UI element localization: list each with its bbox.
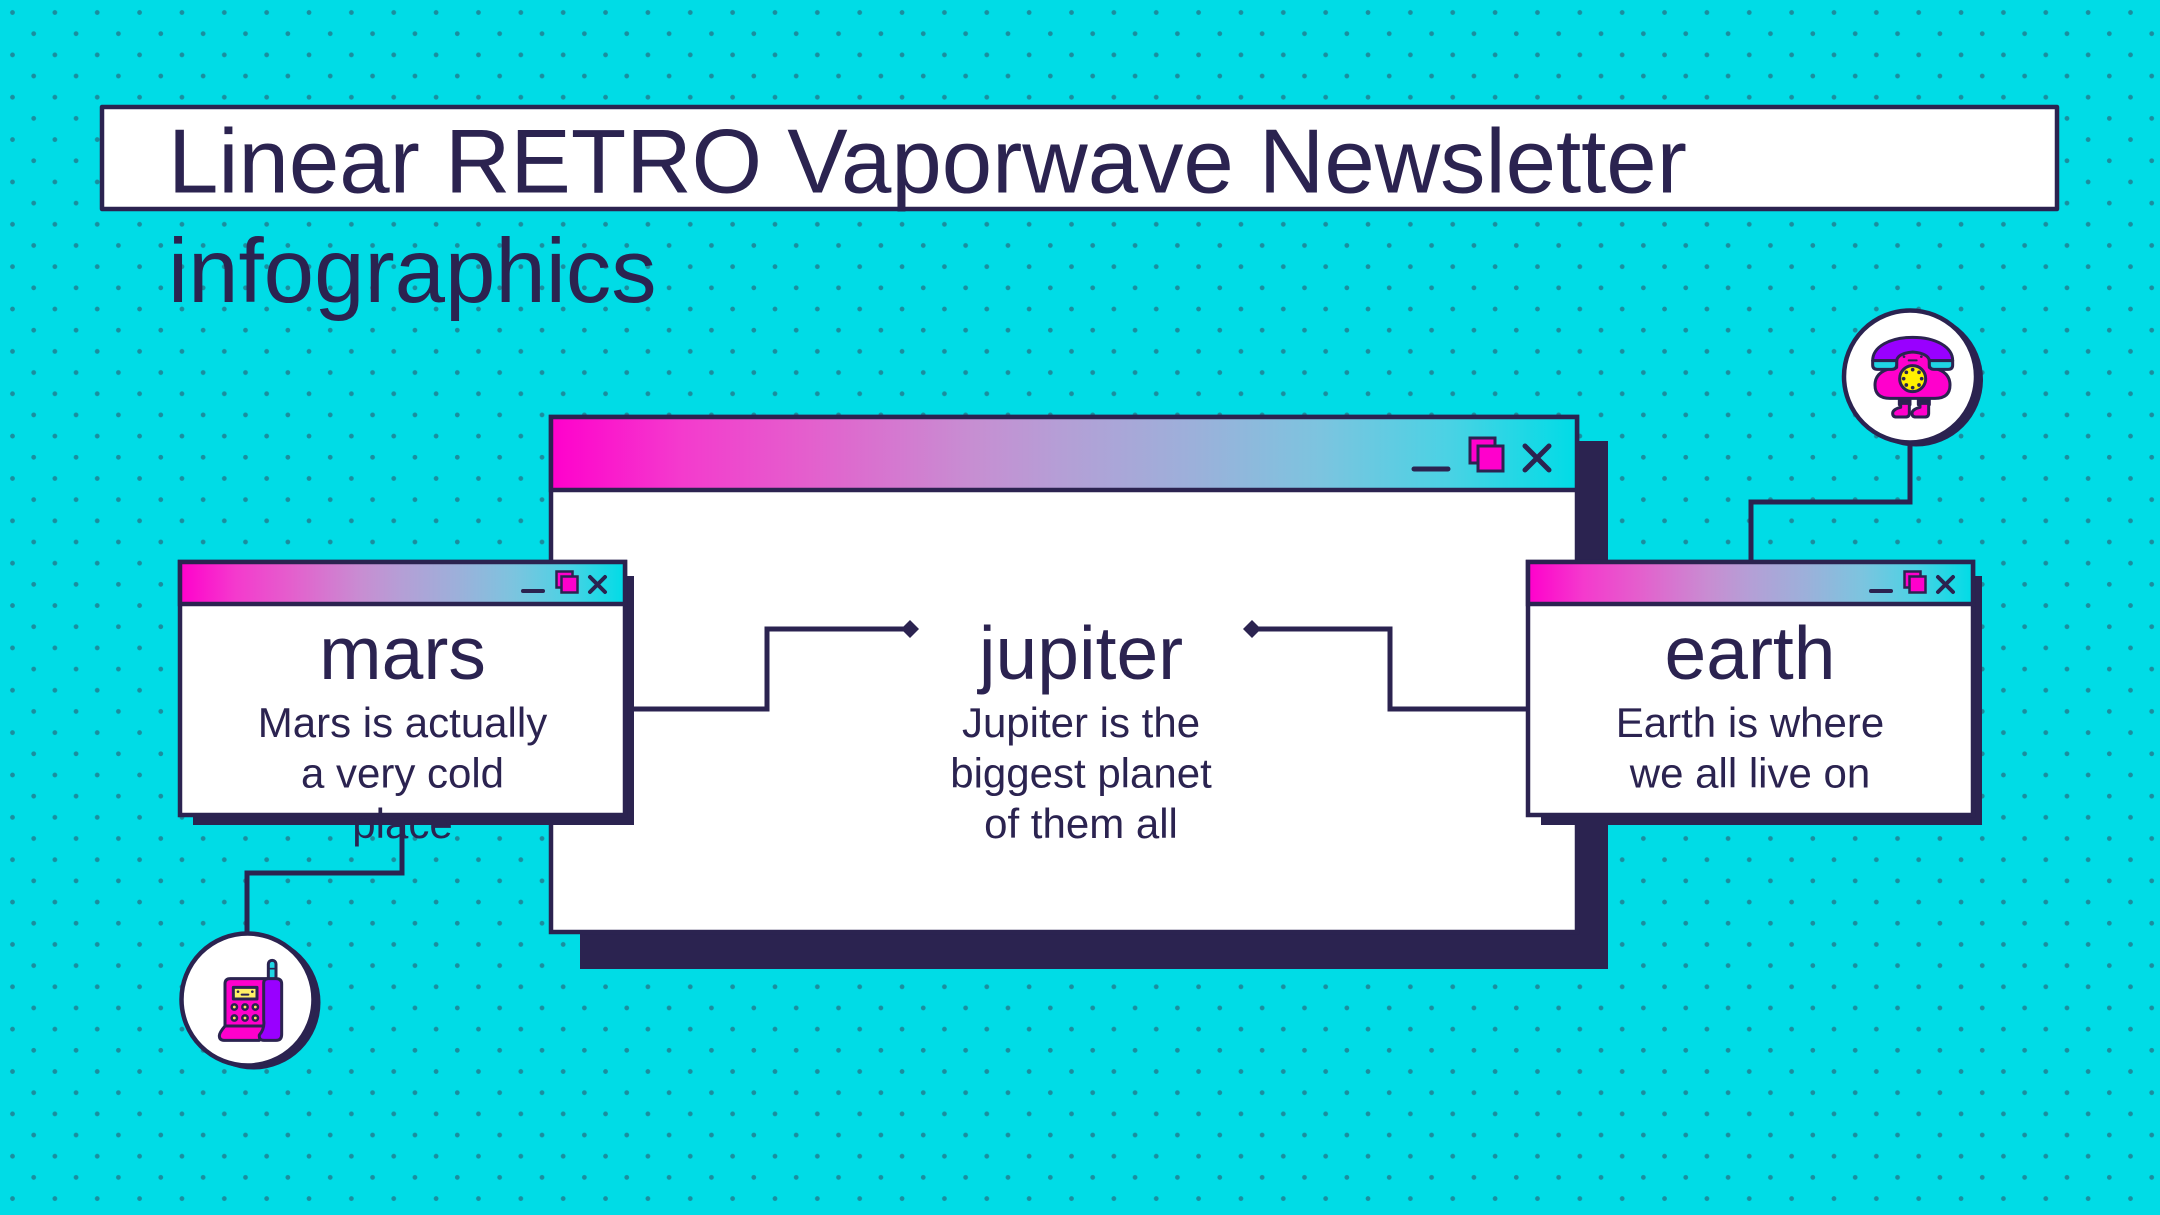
title: infographics — [168, 221, 656, 322]
arrow: earth to jupiter — [1243, 620, 1526, 709]
text block: earth: Earth is where — [1616, 699, 1884, 746]
text block: earth: we all live on — [1629, 750, 1870, 796]
text block: jupiter: of them all — [984, 800, 1178, 847]
text block: mars: mars — [319, 611, 486, 695]
panel: jupiter window — [551, 417, 1608, 969]
text block: mars: Mars is actually — [258, 699, 547, 746]
icon: cordless phone — [182, 934, 320, 1070]
text block: jupiter: biggest planet — [950, 750, 1212, 796]
text block: earth: earth — [1665, 611, 1835, 695]
text block: mars — [258, 611, 547, 847]
title: Linear RETRO Vaporwave Newsletter — [168, 112, 1687, 212]
connector: mars to cordless phone icon — [247, 820, 402, 933]
arrow: mars to jupiter — [631, 620, 919, 709]
icon: rotary telephone — [1844, 310, 1983, 446]
text block: jupiter — [950, 611, 1212, 847]
panel: earth window — [1528, 562, 1982, 825]
title box — [102, 107, 2057, 209]
text block: mars: place — [352, 800, 453, 847]
text block: jupiter: jupiter — [977, 611, 1183, 695]
text block: earth — [1616, 611, 1884, 796]
connector: earth to telephone icon — [1751, 445, 1910, 560]
text block: mars: a very cold — [301, 750, 504, 796]
text block: jupiter: Jupiter is the — [962, 699, 1200, 746]
panel: mars window — [180, 562, 634, 825]
